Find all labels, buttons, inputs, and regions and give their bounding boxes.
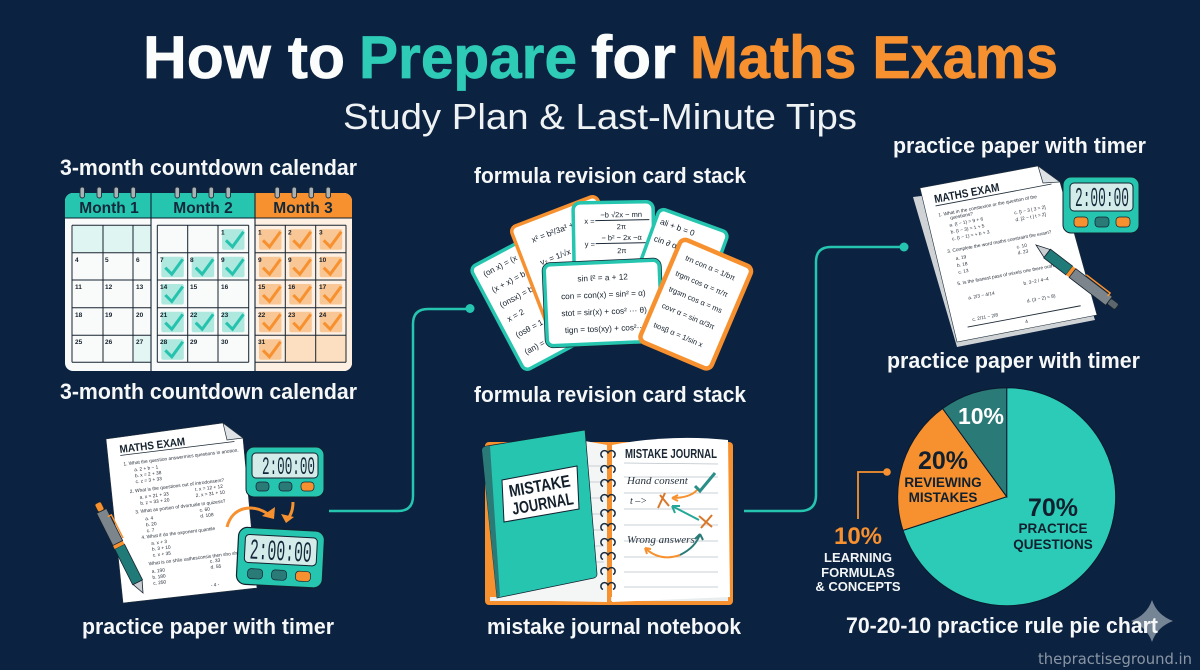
card 2 bbox=[510, 195, 639, 340]
exam text: a. 19 bbox=[955, 254, 967, 262]
page fold bbox=[1038, 166, 1060, 183]
month 2 grid: 28 bbox=[160, 339, 168, 346]
exam text: 5. Is the ibanest pass of mixels one there outh. bbox=[957, 263, 1056, 287]
card 3: −b √2x − mn bbox=[600, 210, 642, 220]
month 2 grid: 21 bbox=[160, 312, 168, 319]
month labels bbox=[79, 200, 333, 217]
exam text: a. 2 + b − 1 bbox=[134, 464, 159, 473]
front cover bbox=[482, 430, 597, 598]
exam text bbox=[119, 430, 255, 598]
month 1 grid: 27 bbox=[136, 339, 144, 346]
watermark star bbox=[1131, 600, 1173, 642]
card 6 bbox=[639, 238, 753, 370]
callout text: 10% bbox=[834, 523, 882, 550]
slice 70 percent bbox=[903, 388, 1116, 606]
exam text: MATHS EXAM bbox=[119, 436, 186, 456]
month 2 grid: 9 bbox=[221, 257, 225, 264]
pen bbox=[1033, 239, 1121, 311]
exam text: c. 7 bbox=[146, 527, 155, 534]
card 6: tιοsβ α = 1/sin x bbox=[652, 320, 704, 349]
exam text: d. [2 − t | t = 2] bbox=[1015, 212, 1046, 223]
exam text: b. 20 bbox=[146, 521, 157, 528]
exam text: questions? bbox=[950, 211, 974, 221]
card 5: con = con(x) = sin² = α) bbox=[561, 289, 646, 301]
exam text: b. 3−2 / 4−4 bbox=[1023, 276, 1050, 287]
exam text: c. z = 3 + 33 bbox=[135, 476, 163, 485]
month 1 grid: 18 bbox=[75, 312, 83, 319]
cover spine band bbox=[482, 446, 500, 598]
exam text: c. 2/11 − 2/8 bbox=[972, 312, 999, 323]
month 3 grid bbox=[255, 225, 346, 362]
month 1 grid: 11 bbox=[75, 284, 82, 291]
exam text: b. z = 33 + 20 bbox=[140, 497, 170, 507]
heading: cards bottom: formula revision card stack bbox=[474, 382, 747, 407]
month 1 grid: 5 bbox=[105, 257, 109, 264]
page fold bbox=[223, 423, 243, 440]
timer bbox=[1063, 177, 1139, 233]
card 6: trgm cos α = π/π bbox=[674, 269, 729, 299]
spine gap bbox=[607, 443, 611, 603]
cover label: JOURNAL bbox=[511, 489, 575, 519]
timer lower bbox=[236, 527, 325, 588]
month labels: Month 2 bbox=[173, 200, 233, 217]
heading: pie chart: 70-20-10 practice rule pie chart bbox=[846, 613, 1159, 638]
panel: formula card stack bbox=[470, 195, 753, 371]
month labels: Month 1 bbox=[79, 200, 139, 217]
heading: cards top: formula revision card stack bbox=[474, 163, 747, 188]
card 4: cin ∂ α bbox=[653, 234, 678, 251]
month 2 grid: 1 bbox=[221, 230, 225, 236]
month 2 grid: 29 bbox=[190, 339, 198, 346]
timer: 2:00:00 bbox=[1075, 185, 1129, 215]
month 3 grid: 31 bbox=[258, 339, 266, 346]
card 1: (onsx) = b bbox=[498, 284, 535, 310]
callout line bbox=[858, 468, 891, 519]
card 4: ali + b = 0 bbox=[659, 217, 696, 238]
page ruled lines bbox=[589, 463, 718, 587]
card 3: − b² − 2x −α bbox=[601, 233, 643, 243]
month 3 grid: 2 bbox=[288, 230, 292, 236]
exam text: t. x = 12 + 12 bbox=[195, 484, 224, 493]
card 4 bbox=[626, 208, 729, 327]
arrow: paper to formula cards bbox=[329, 304, 474, 511]
card 6: trn con α = 1/bπ bbox=[684, 253, 737, 283]
exam text: 4. What if do the oxponent quantile bbox=[141, 526, 216, 541]
callout text: LEARNING bbox=[824, 550, 892, 565]
exam text: b. 3 + 10 bbox=[152, 545, 171, 553]
title: Prepare bbox=[359, 24, 577, 91]
month 2 grid: 14 bbox=[160, 284, 168, 291]
handwritten notes bbox=[626, 475, 695, 546]
exam text: b. 180 bbox=[152, 573, 166, 581]
exam text: a. x = 21 + 33 bbox=[139, 491, 169, 501]
exam text: c. (t − 1) = + b + 3 bbox=[952, 229, 990, 242]
exam text: c. 13 bbox=[958, 268, 969, 276]
watermark text: thepractiseground.in bbox=[1038, 650, 1192, 668]
exam text: 1. What in the constexion or the question of the bbox=[938, 194, 1038, 219]
label 20 percent: REVIEWING bbox=[904, 475, 982, 490]
back cover bbox=[485, 442, 733, 605]
month 3 grid: 1 bbox=[258, 230, 262, 236]
heading: paper top right caption: practice paper with timer bbox=[887, 348, 1140, 373]
callout text: FORMULAS bbox=[821, 565, 895, 580]
exam text bbox=[933, 171, 1082, 338]
card 1: (an) = tan bbox=[523, 332, 559, 356]
pen bbox=[93, 500, 149, 595]
exam text: d. (3 − 2) = 8) bbox=[1026, 293, 1056, 305]
arrows between timers bbox=[227, 502, 294, 527]
exam text: 3. What as portion of dvortuale in quizess? bbox=[135, 499, 226, 516]
card 3: 2π bbox=[617, 222, 626, 231]
month 3 grid: 9 bbox=[288, 257, 292, 264]
exam text: MATHS EXAM bbox=[933, 182, 1000, 206]
exam text: c. 250 bbox=[153, 579, 167, 587]
exam text: a. 2/3 − 4/14 bbox=[968, 290, 996, 301]
exam text: a. x + 3 bbox=[151, 539, 168, 547]
panel: mistake journal notebook bbox=[482, 430, 733, 605]
exam text: d. 108 bbox=[200, 512, 214, 520]
month 2 grid: 7 bbox=[160, 257, 164, 264]
exam text: c. 33 bbox=[210, 558, 221, 565]
exam text: 4 bbox=[1025, 319, 1029, 325]
exam text: d. 23 bbox=[1017, 249, 1029, 256]
heading: calendar bottom: 3-month countdown calendar bbox=[60, 379, 357, 404]
month 3 grid: 10 bbox=[319, 257, 327, 264]
month labels: Month 3 bbox=[273, 200, 333, 217]
spiral binding bbox=[601, 451, 615, 590]
timer upper bbox=[246, 447, 324, 497]
right page bbox=[612, 438, 730, 602]
title: for bbox=[591, 24, 676, 91]
exam text: 1. What the question answermics questions in anotion. bbox=[123, 448, 239, 468]
exam sheet bbox=[106, 423, 257, 603]
slice 10 percent bbox=[943, 388, 1007, 497]
month 2 grid: 23 bbox=[221, 312, 229, 319]
card 1: x = 2 bbox=[506, 307, 526, 324]
month 2 grid: 8 bbox=[190, 257, 194, 264]
label 70 percent: PRACTICE bbox=[1018, 521, 1088, 536]
slice 20 percent bbox=[898, 408, 1007, 530]
month 3 grid: 3 bbox=[319, 230, 323, 236]
month 1 grid: 13 bbox=[136, 284, 144, 291]
card 3: 2π bbox=[617, 246, 627, 255]
exam text: b. (t − 3) = 1 + 5 bbox=[950, 223, 985, 236]
cover label: MISTAKE bbox=[507, 471, 572, 501]
month 1 grid: 19 bbox=[105, 312, 113, 319]
card 1: (x + x) = b bbox=[490, 269, 527, 295]
cover label bbox=[502, 466, 579, 522]
exam text: 2. What is the questions out of introdonsers? bbox=[129, 478, 225, 495]
month 3 grid: 22 bbox=[258, 312, 266, 319]
card 2: v₂ = 1/√x + 2 bbox=[539, 242, 585, 267]
exam text: c. [t − 3 | 3 = 2] bbox=[1014, 205, 1046, 216]
card 1: (on x) = (x bbox=[482, 253, 519, 279]
timer upper: 2:00:00 bbox=[262, 453, 315, 482]
card 2: x² = b²/3a² + b² bbox=[530, 217, 584, 245]
label 20 percent bbox=[904, 447, 982, 505]
exam text: c. 10 bbox=[1016, 243, 1028, 251]
handwritten notes: Wrong answers bbox=[627, 534, 695, 546]
card 5: stot = sir(x) + cos² ··· θ) bbox=[561, 306, 647, 318]
exam text: b. x = 2 + 38 bbox=[135, 470, 162, 479]
exam text: - 4 - bbox=[211, 582, 220, 589]
card 6: trgɜm cos α = ms bbox=[667, 284, 724, 315]
title: How to bbox=[143, 24, 345, 91]
panel: 3-month calendar bbox=[65, 187, 352, 371]
title: Maths Exams bbox=[690, 24, 1058, 91]
handwritten notes: t –> bbox=[630, 496, 647, 507]
month 3 grid: 23 bbox=[288, 312, 296, 319]
callout text bbox=[815, 523, 901, 594]
month 2 grid: 22 bbox=[190, 312, 198, 319]
month 2 grid bbox=[157, 225, 249, 362]
handwritten notes: Hand consent bbox=[626, 475, 689, 487]
month 2 grid: 15 bbox=[190, 284, 198, 291]
month 1 grid: 20 bbox=[136, 312, 144, 319]
binder rings bbox=[80, 187, 330, 198]
exam text: 3. Complete the word maths constraint the exam? bbox=[947, 229, 1052, 255]
exam text: 2. x = 31 + 10 bbox=[195, 489, 226, 499]
heading: journal: mistake journal notebook bbox=[487, 614, 742, 639]
heading: calendar top: 3-month countdown calendar bbox=[60, 155, 357, 180]
exam text: a. (t − 1) = 9 + 6 bbox=[949, 216, 984, 229]
callout text: & CONCEPTS bbox=[815, 579, 901, 594]
arrow: journal to practice paper bbox=[744, 242, 908, 511]
card 5: sin ℓ² = a + 12 bbox=[577, 272, 628, 284]
card 5: tign = tos(xy) + cos²··· bbox=[565, 323, 645, 335]
month 1 grid: 26 bbox=[105, 339, 113, 346]
label 70 percent: QUESTIONS bbox=[1013, 537, 1093, 552]
page heading: MISTAKE JOURNAL bbox=[625, 447, 717, 461]
card 5 bbox=[544, 260, 662, 346]
heading: paper top right: practice paper with timer bbox=[893, 133, 1146, 158]
month 1 grid: 4 bbox=[75, 257, 79, 264]
month 1 grid: 12 bbox=[105, 284, 113, 291]
panel: practice paper with timer, top right bbox=[913, 166, 1139, 347]
month 3 grid: 24 bbox=[319, 312, 327, 319]
month 3 grid: 16 bbox=[288, 284, 296, 291]
card 3 bbox=[573, 202, 654, 275]
month 2 grid: 30 bbox=[221, 339, 229, 346]
panel: practice paper with timers, bottom left bbox=[93, 423, 325, 603]
month 3 grid: 17 bbox=[319, 284, 327, 291]
timer lower: 2:00:00 bbox=[249, 535, 313, 571]
card 1 bbox=[470, 227, 603, 371]
marks and arrows bbox=[645, 473, 715, 557]
label 70 percent bbox=[1013, 494, 1093, 552]
exam text: What is on shilo xathesconsis then sho show? bbox=[148, 549, 247, 567]
subtitle: Study Plan & Last-Minute Tips bbox=[343, 96, 857, 137]
month 3 grid: 15 bbox=[258, 284, 266, 291]
card 3: x = bbox=[584, 217, 595, 226]
card 3: y = bbox=[585, 240, 596, 249]
exam text: b. 18 bbox=[957, 261, 968, 269]
title bbox=[143, 24, 1058, 91]
month 1 grid bbox=[72, 225, 150, 362]
exam text: c. 60 bbox=[199, 506, 211, 514]
exam text: d. 55 bbox=[210, 563, 222, 571]
month 2 grid: 16 bbox=[221, 284, 229, 291]
card 6: cοvr α = sin α/3π bbox=[660, 301, 716, 331]
back sheet bbox=[913, 180, 1095, 347]
heading: paper bottom left: practice paper with timer bbox=[82, 614, 334, 639]
month 1 grid: 25 bbox=[75, 339, 83, 346]
exam text: a. 190 bbox=[151, 567, 166, 575]
exam text: a. 4 bbox=[145, 515, 154, 522]
label 70 percent: 70% bbox=[1028, 494, 1078, 522]
label 20 percent: MISTAKES bbox=[909, 490, 977, 505]
card 1: (osθ = 1 bbox=[514, 318, 545, 340]
panel: pie chart bbox=[815, 388, 1116, 606]
exam text: c. x + 35 bbox=[152, 551, 172, 559]
exam sheet bbox=[920, 166, 1097, 342]
month 1 grid: 6 bbox=[136, 257, 140, 264]
month 3 grid: 9 bbox=[258, 257, 262, 264]
left page bbox=[490, 441, 607, 602]
label 10 percent: 10% bbox=[958, 403, 1004, 429]
label 20 percent: 20% bbox=[918, 447, 968, 475]
card 2: (sin) bbox=[541, 280, 559, 294]
